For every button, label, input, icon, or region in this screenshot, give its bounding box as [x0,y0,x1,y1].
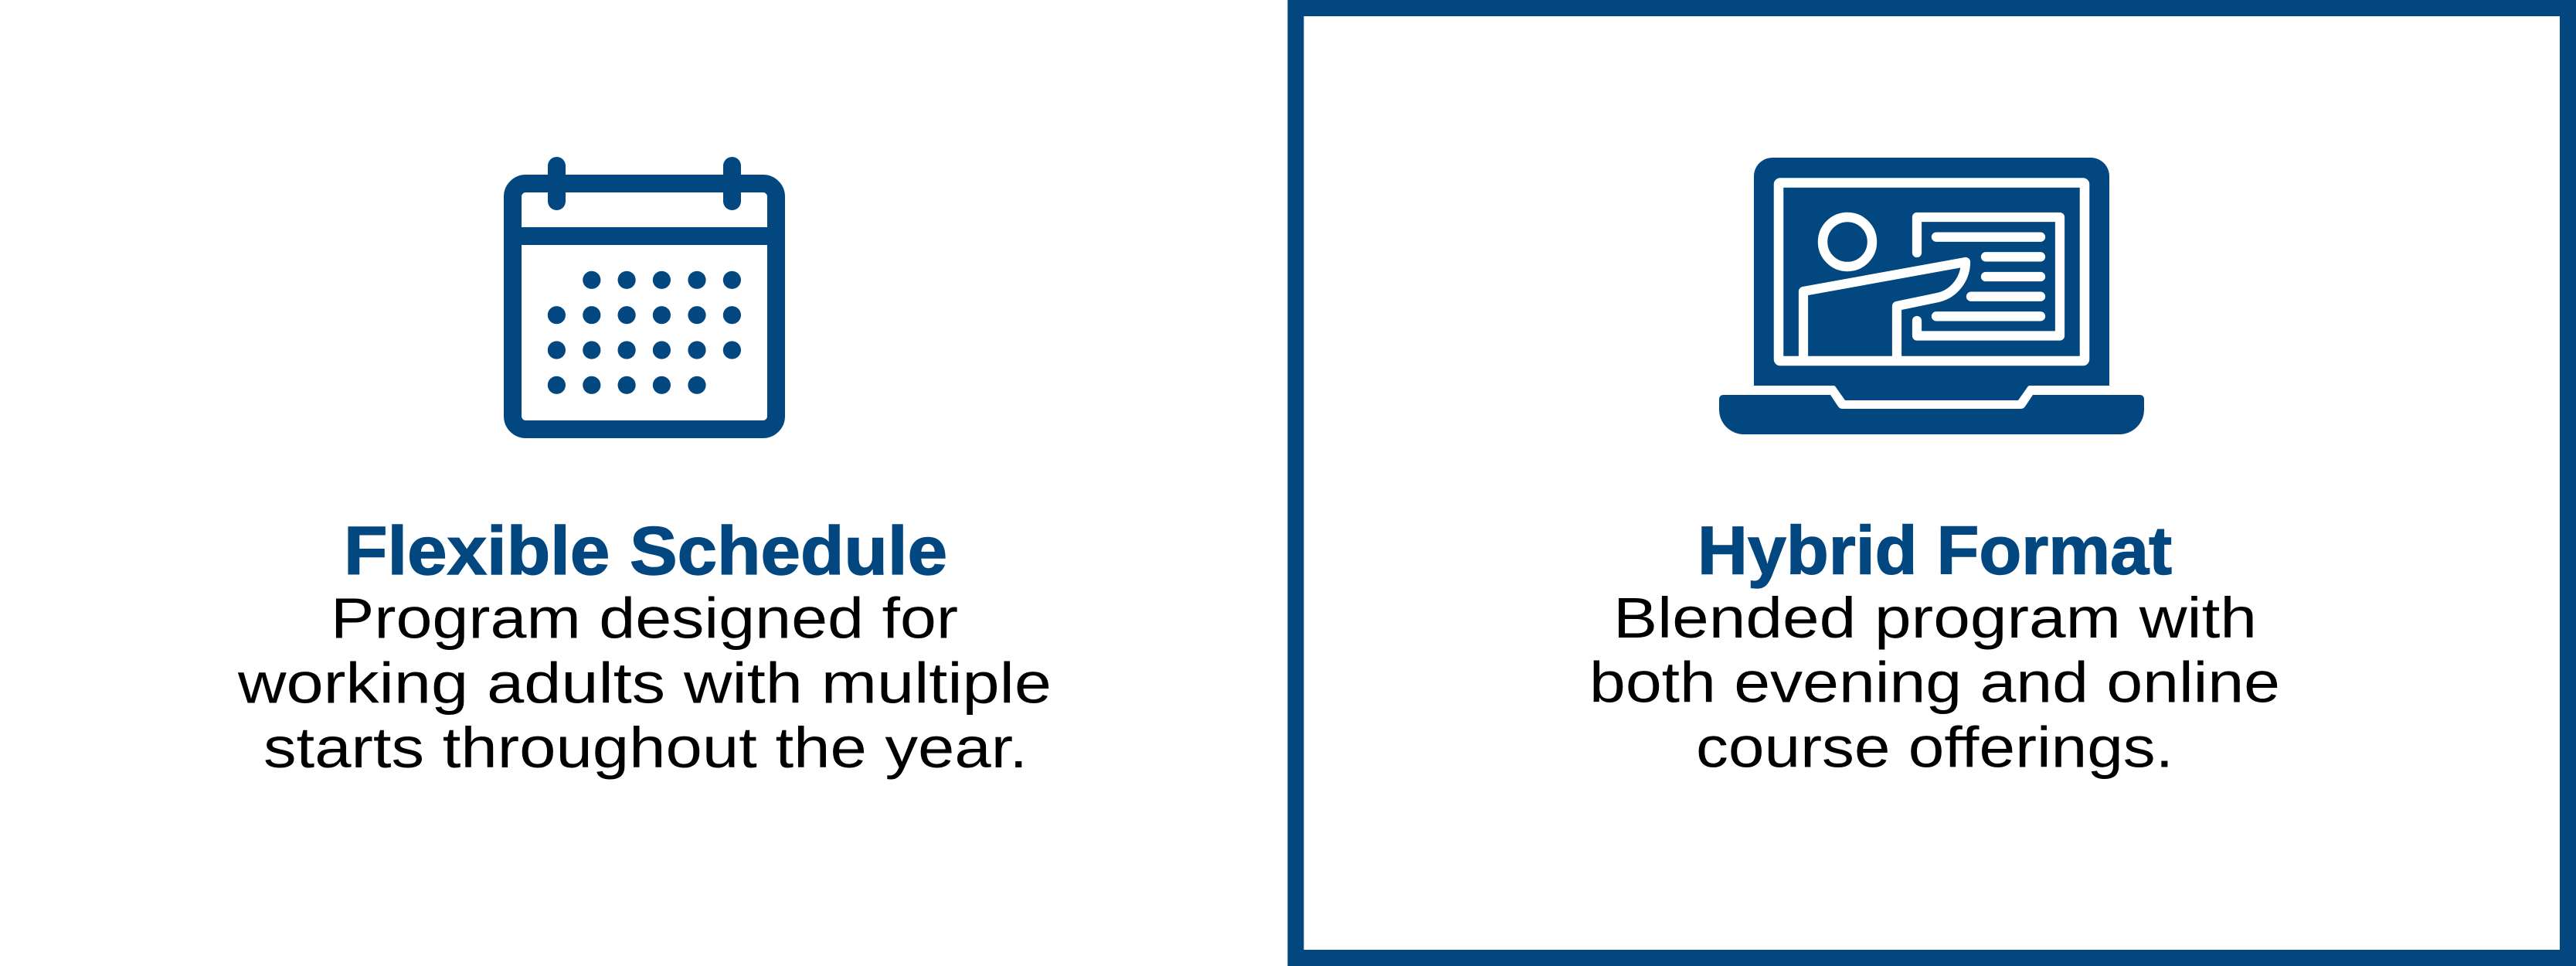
text block: hybrid format description: both evening and online [1589,651,2280,714]
panel: flexible schedule [237,165,1052,780]
text block: flexible schedule description: starts throughout the year. [263,716,1028,780]
text block: hybrid format description: course offerings. [1696,716,2173,779]
text block: hybrid format description: Blended program with [1613,586,2257,650]
icon: laptop with presenter [1719,158,2144,434]
icon: calendar [504,165,785,430]
heading: Flexible Schedule: Flexible Schedule [344,512,947,589]
text block: flexible schedule description [237,586,1052,780]
text block: flexible schedule description: working adults with multiple [237,651,1052,716]
heading: Hybrid Format: Hybrid Format [1698,512,2172,589]
panel border [1296,8,2568,958]
text block: hybrid format description [1589,586,2280,779]
text block: flexible schedule description: Program designed for [331,586,958,651]
panel: hybrid format [1296,8,2568,958]
